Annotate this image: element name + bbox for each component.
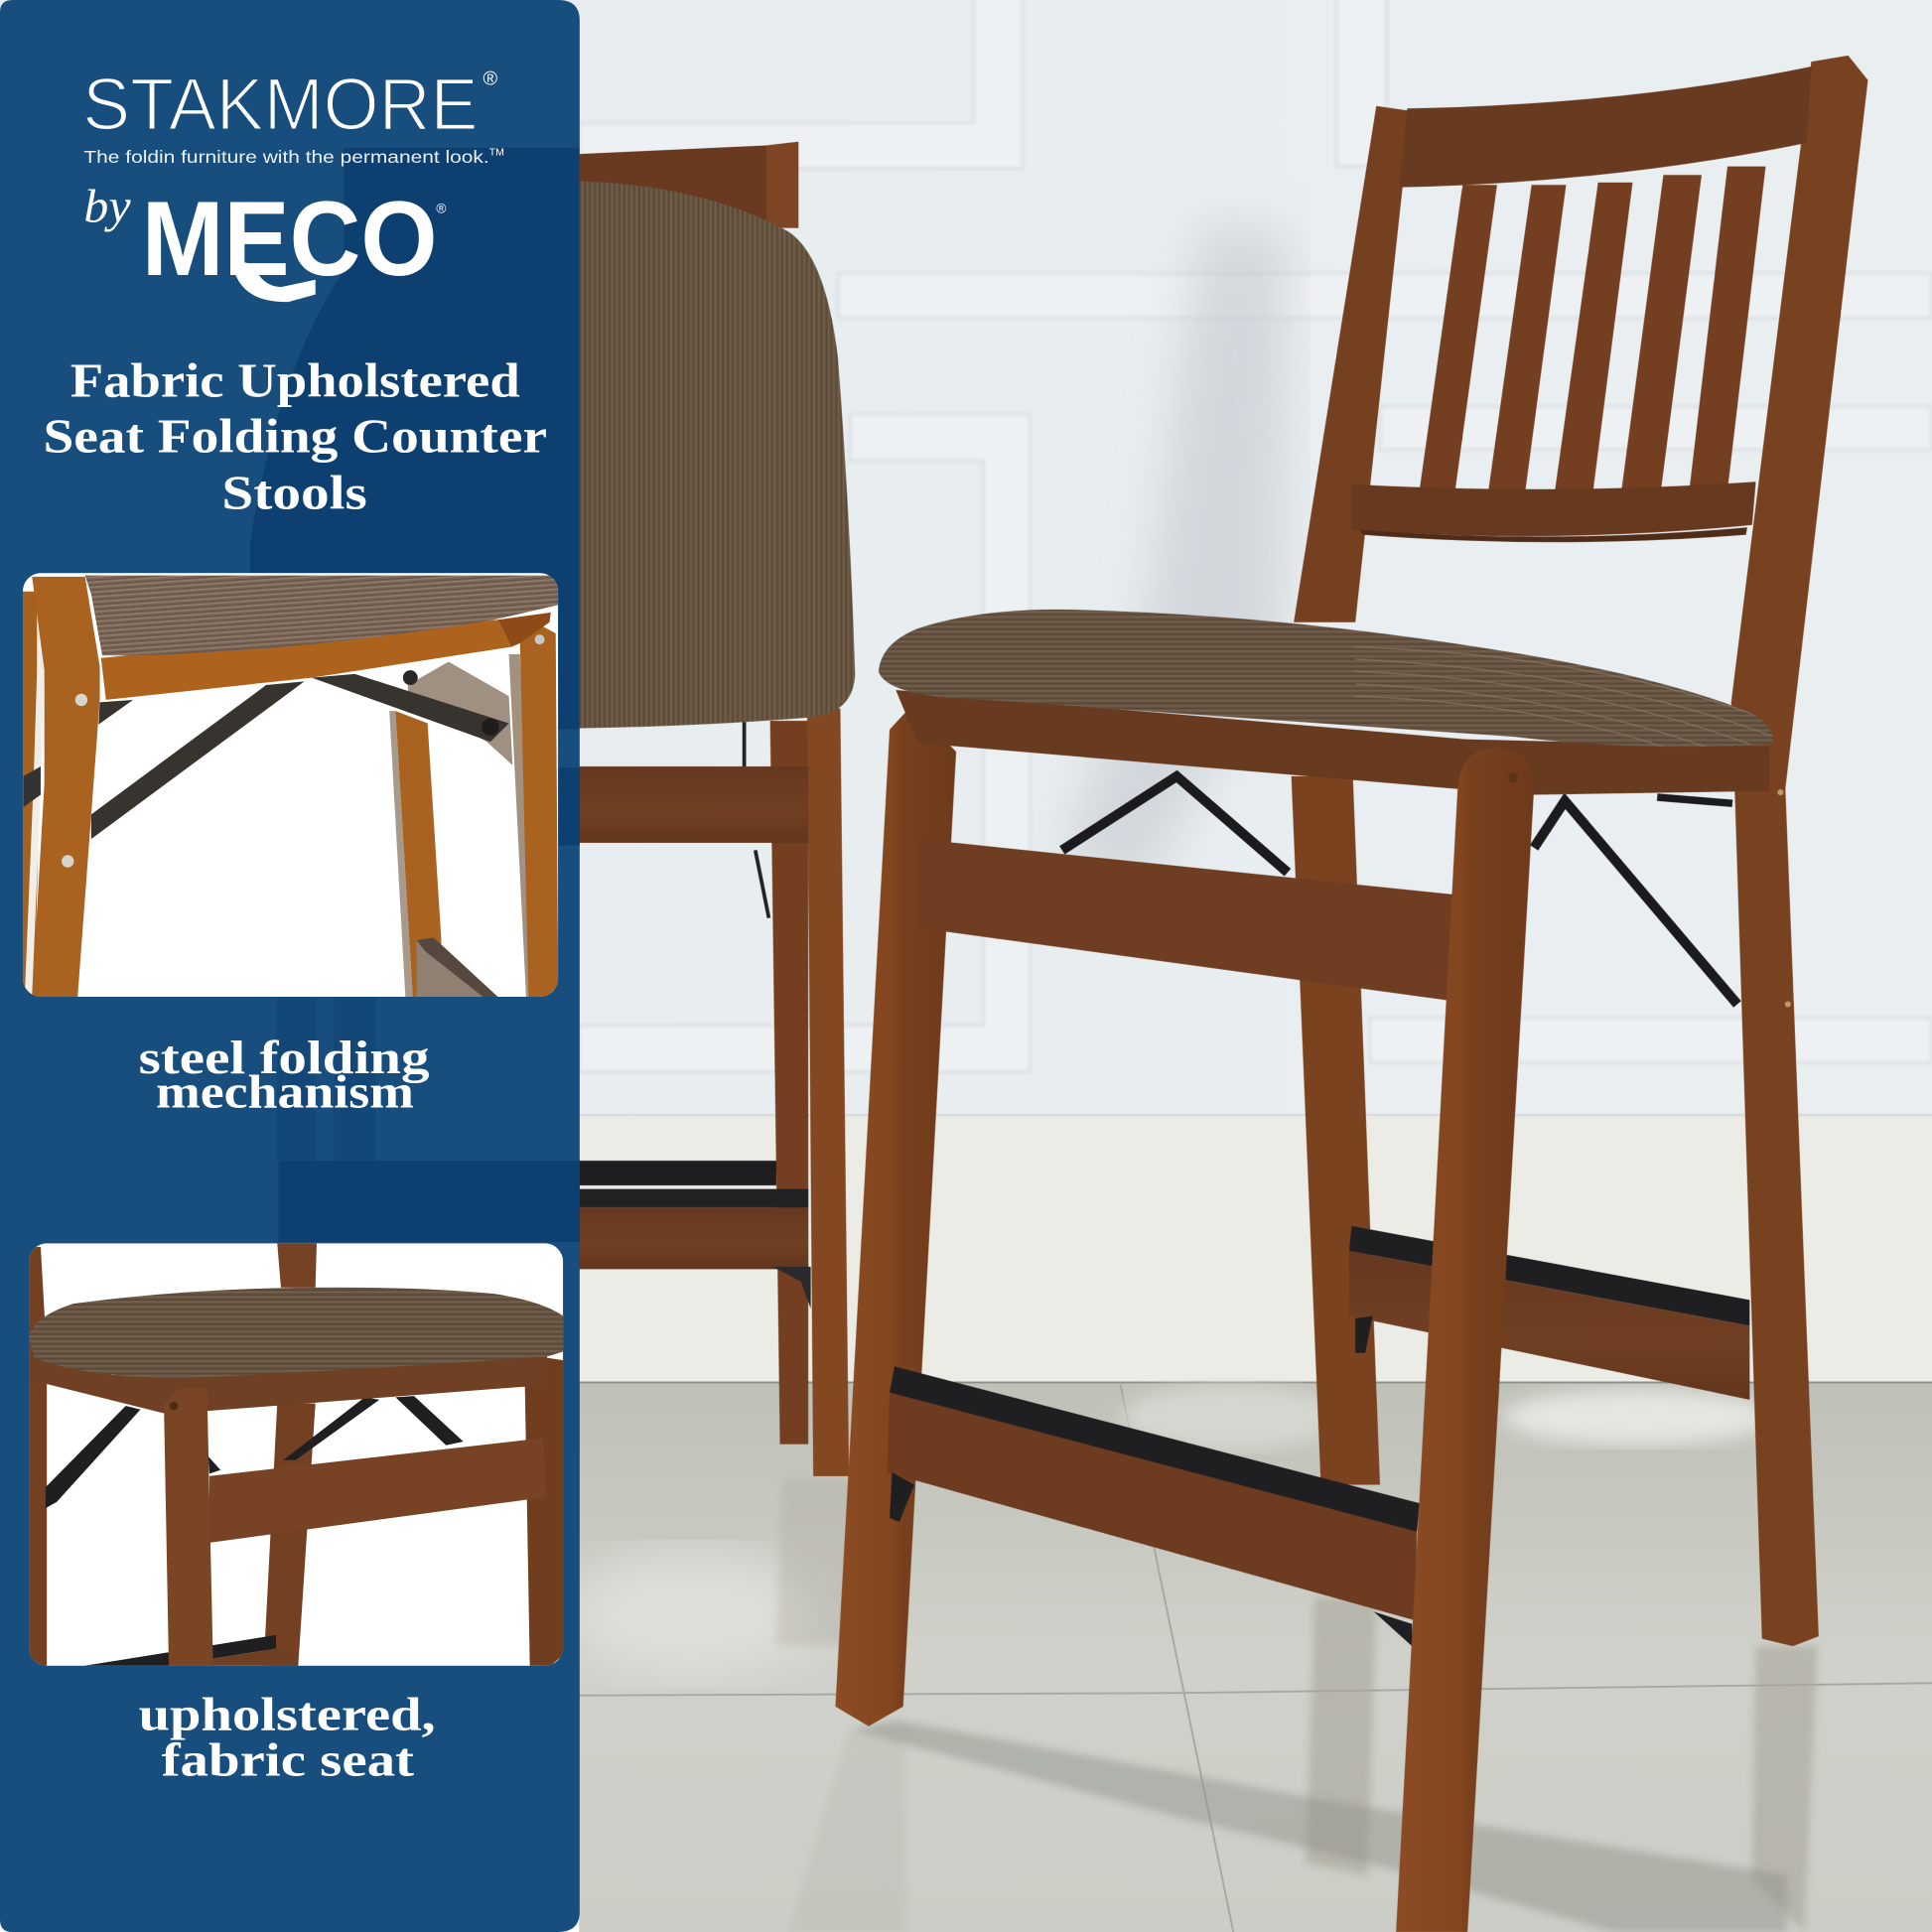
- caption: steel folding mechanism: [140, 1039, 429, 1108]
- brand logo: The foldin furniture with the permanent look.: [83, 147, 489, 167]
- cushion: [85, 576, 558, 655]
- ghost shapes behind panel: [250, 148, 581, 1242]
- black braces: [46, 1396, 464, 1508]
- front left leg: [835, 712, 956, 1726]
- brand logo: STAKMORE: [82, 63, 479, 145]
- right leg: [520, 624, 558, 997]
- brand logo: MECO: [142, 179, 438, 298]
- front right leg: [1396, 747, 1534, 1932]
- brand logo: [82, 63, 504, 302]
- lower metal rail: [416, 937, 497, 997]
- inset photo: upholstered seat: [29, 1243, 563, 1666]
- back slats: [1420, 167, 1765, 490]
- cushion: [29, 1288, 563, 1379]
- brand logo: TM: [489, 146, 504, 158]
- rear foot rail: [1349, 1251, 1749, 1400]
- caption: steel folding mechanism: mechanism: [156, 1067, 414, 1119]
- floor shadow of stool: [853, 1721, 1787, 1932]
- right post and rear right leg: [1731, 56, 1867, 1646]
- caption: steel folding mechanism: steel folding: [139, 1033, 430, 1084]
- brand logo: ®: [436, 202, 446, 216]
- cross braces: [1062, 776, 1737, 1004]
- title: Fabric Upholstered: [70, 355, 520, 408]
- rear leg: [389, 711, 413, 997]
- rear stool cushion: [579, 181, 855, 728]
- caption: upholstered fabric seat: [139, 1698, 433, 1776]
- floor: [567, 1382, 1932, 1932]
- right leg: [525, 1358, 563, 1666]
- floor reflections: [776, 1478, 1818, 1932]
- black brace bars: [91, 674, 509, 839]
- inset photo: folding mechanism: [22, 573, 558, 997]
- title: Seat Folding Counter: [43, 410, 547, 463]
- seat skirt: [896, 690, 1769, 794]
- metal plate: [408, 661, 512, 765]
- lower black rail: [83, 1635, 276, 1666]
- brand logo: by: [83, 181, 131, 232]
- upper front rail: [918, 839, 1453, 1001]
- wall moldings: [579, 0, 1932, 1072]
- wall shadow of stool: [1059, 221, 1288, 888]
- rear folded stool: [579, 142, 855, 1476]
- front leg: [164, 1389, 213, 1666]
- metal brackets: [1355, 1315, 1373, 1353]
- rear left leg: [1292, 776, 1380, 1484]
- top back rail: [1400, 67, 1811, 188]
- front foot rail: [888, 1392, 1417, 1620]
- front stool: [835, 56, 1867, 1932]
- seat frame: [31, 1356, 547, 1414]
- left upright: [1294, 106, 1411, 622]
- seat frame: [101, 620, 511, 700]
- title: [46, 363, 546, 509]
- seat cushion: [879, 610, 1774, 750]
- brand logo: ®: [483, 69, 497, 90]
- left leg: [32, 577, 100, 997]
- caption: upholstered fabric seat: fabric seat: [162, 1734, 414, 1786]
- title: Stools: [221, 468, 367, 520]
- caption: upholstered fabric seat: upholstered,: [139, 1689, 436, 1740]
- panel: blue sidebar: [0, 0, 581, 1932]
- wall background: [0, 0, 1932, 1384]
- stretcher rail: [209, 1438, 546, 1543]
- middle back rail: [1351, 482, 1756, 536]
